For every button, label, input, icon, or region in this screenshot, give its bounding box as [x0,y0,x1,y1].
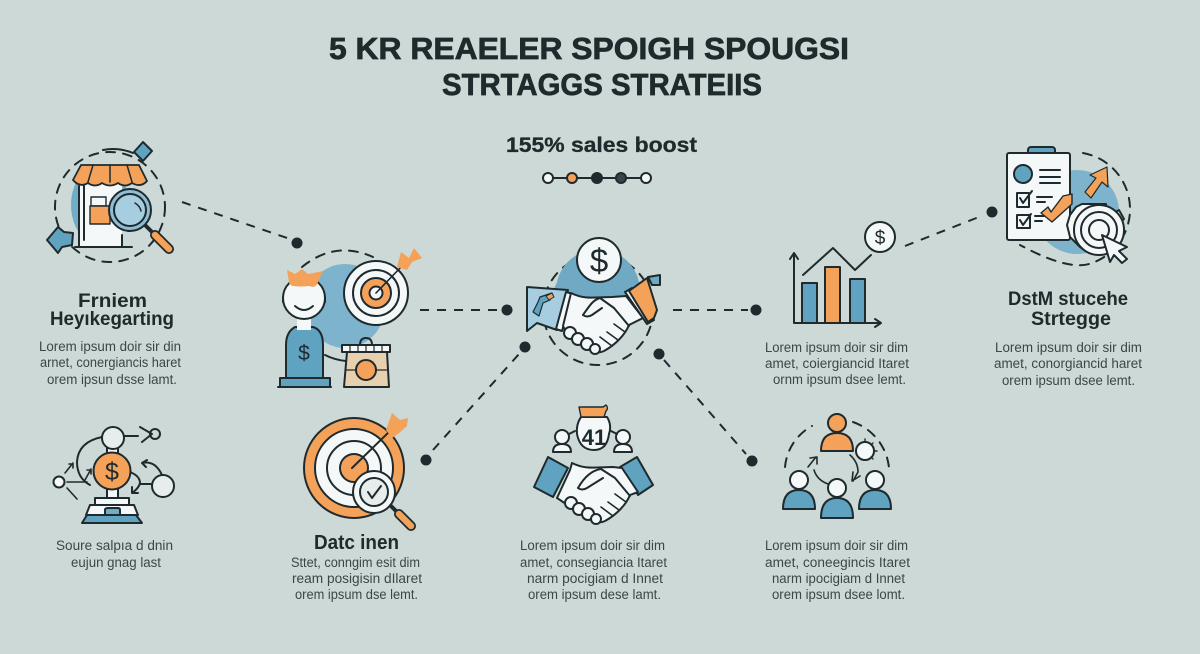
text: team deal: narm pocigiam d Innet [527,571,663,586]
heading: strategy checklist [1008,289,1128,330]
icon: handshake with bag and people: 41 [582,425,606,450]
text: sales chart: ornm ipsum dsee lemt. [773,372,906,387]
connector: handshake to chart [673,304,762,316]
text: store search: orem ipsun dsse lamt. [47,372,177,387]
text: data insight [291,555,422,602]
icon: person with target and bag: $ [298,342,310,365]
heading: store search: Frniem [78,291,147,312]
text: data insight: ream posigisin dIlaret [292,571,422,586]
panel: strategy checklist [994,147,1142,388]
text: pricing [56,538,173,570]
panel: sales chart [765,222,909,387]
text: pricing: eujun gnag last [71,555,161,570]
icon: team cycle [783,414,891,518]
connector: handshake to team [654,348,758,466]
icon: person with target and bag [278,248,422,387]
icon: storefront with magnifier [47,142,169,262]
panel: data insight [291,413,422,602]
title: 5 KR REAELER SPOIGH SPOUGSI [329,31,849,66]
panel: team deal [520,405,667,602]
text: team workflow [765,538,910,602]
text: strategy checklist [994,340,1142,388]
text: data insight: orem ipsum dse lemt. [295,587,418,602]
heading: strategy checklist: DstM stucehe [1008,289,1128,310]
panel: store search [39,142,181,387]
text: sales chart [765,340,909,387]
text: team deal: Lorem ipsum doir sir dim [520,538,665,553]
text: sales chart: Lorem ipsum doir sir dim [765,340,908,355]
panel: customer targeting [278,248,422,387]
icon: target with magnifier [304,413,411,526]
text: team workflow: Lorem ipsum doir sir dim [765,538,908,553]
title: STRTAGGS STRATEIIS [442,67,762,102]
heading: data insight: Datc inen [314,532,399,554]
text: team workflow: orem ipsum dsee lomt. [772,587,905,602]
icon: handshake with dollar coin: $ [590,242,608,279]
icon: bar chart with dollar: $ [875,228,886,249]
text: strategy checklist: orem ipsum dsee lemt. [1002,373,1135,388]
subtitle: sales boost: 155% sales boost [506,134,697,157]
text: team deal: amet, consegiancia Itaret [520,555,667,570]
progress dots [543,173,651,183]
text: strategy checklist: amet, conorgiancid haret [994,356,1142,371]
title [329,31,849,102]
icon: dollar pedestal with nodes: $ [105,458,119,486]
connector: chart to clipboard [905,206,998,246]
heading: strategy checklist: Strtegge [1031,309,1111,330]
text: team deal: orem ipsum dese lamt. [528,587,661,602]
panel: team workflow [765,414,910,602]
icon: clipboard with target and cursor [1007,147,1130,265]
text: team deal [520,538,667,602]
text: store search: Lorem ipsum doir sir din [39,339,181,354]
text: store search: arnet, conergiancis haret [40,355,181,370]
icon: handshake with bag and people [534,405,653,524]
text: pricing: Soure salpıa d dnin [56,538,173,553]
text: strategy checklist: Lorem ipsum doir sir dim [995,340,1142,355]
text: sales chart: amet, coiergiancid Itaret [765,356,909,371]
connector: target to handshake [420,342,530,466]
text: data insight: Sttet, conngim esit dim [291,555,420,570]
panel: partnership handshake [527,238,660,365]
connector: customer to handshake [420,304,512,316]
icon: bar chart with dollar [790,222,895,327]
connector: store to customer [182,202,302,248]
text: team workflow: amet, coneegincis Itaret [765,555,910,570]
heading: store search: Heyıkegarting [50,309,174,330]
text: team workflow: narm ipocigiam d Innet [772,571,905,586]
icon: dollar pedestal with nodes [54,427,174,523]
heading: store search [50,291,174,330]
panel: pricing [54,427,174,570]
text: store search [39,339,181,387]
